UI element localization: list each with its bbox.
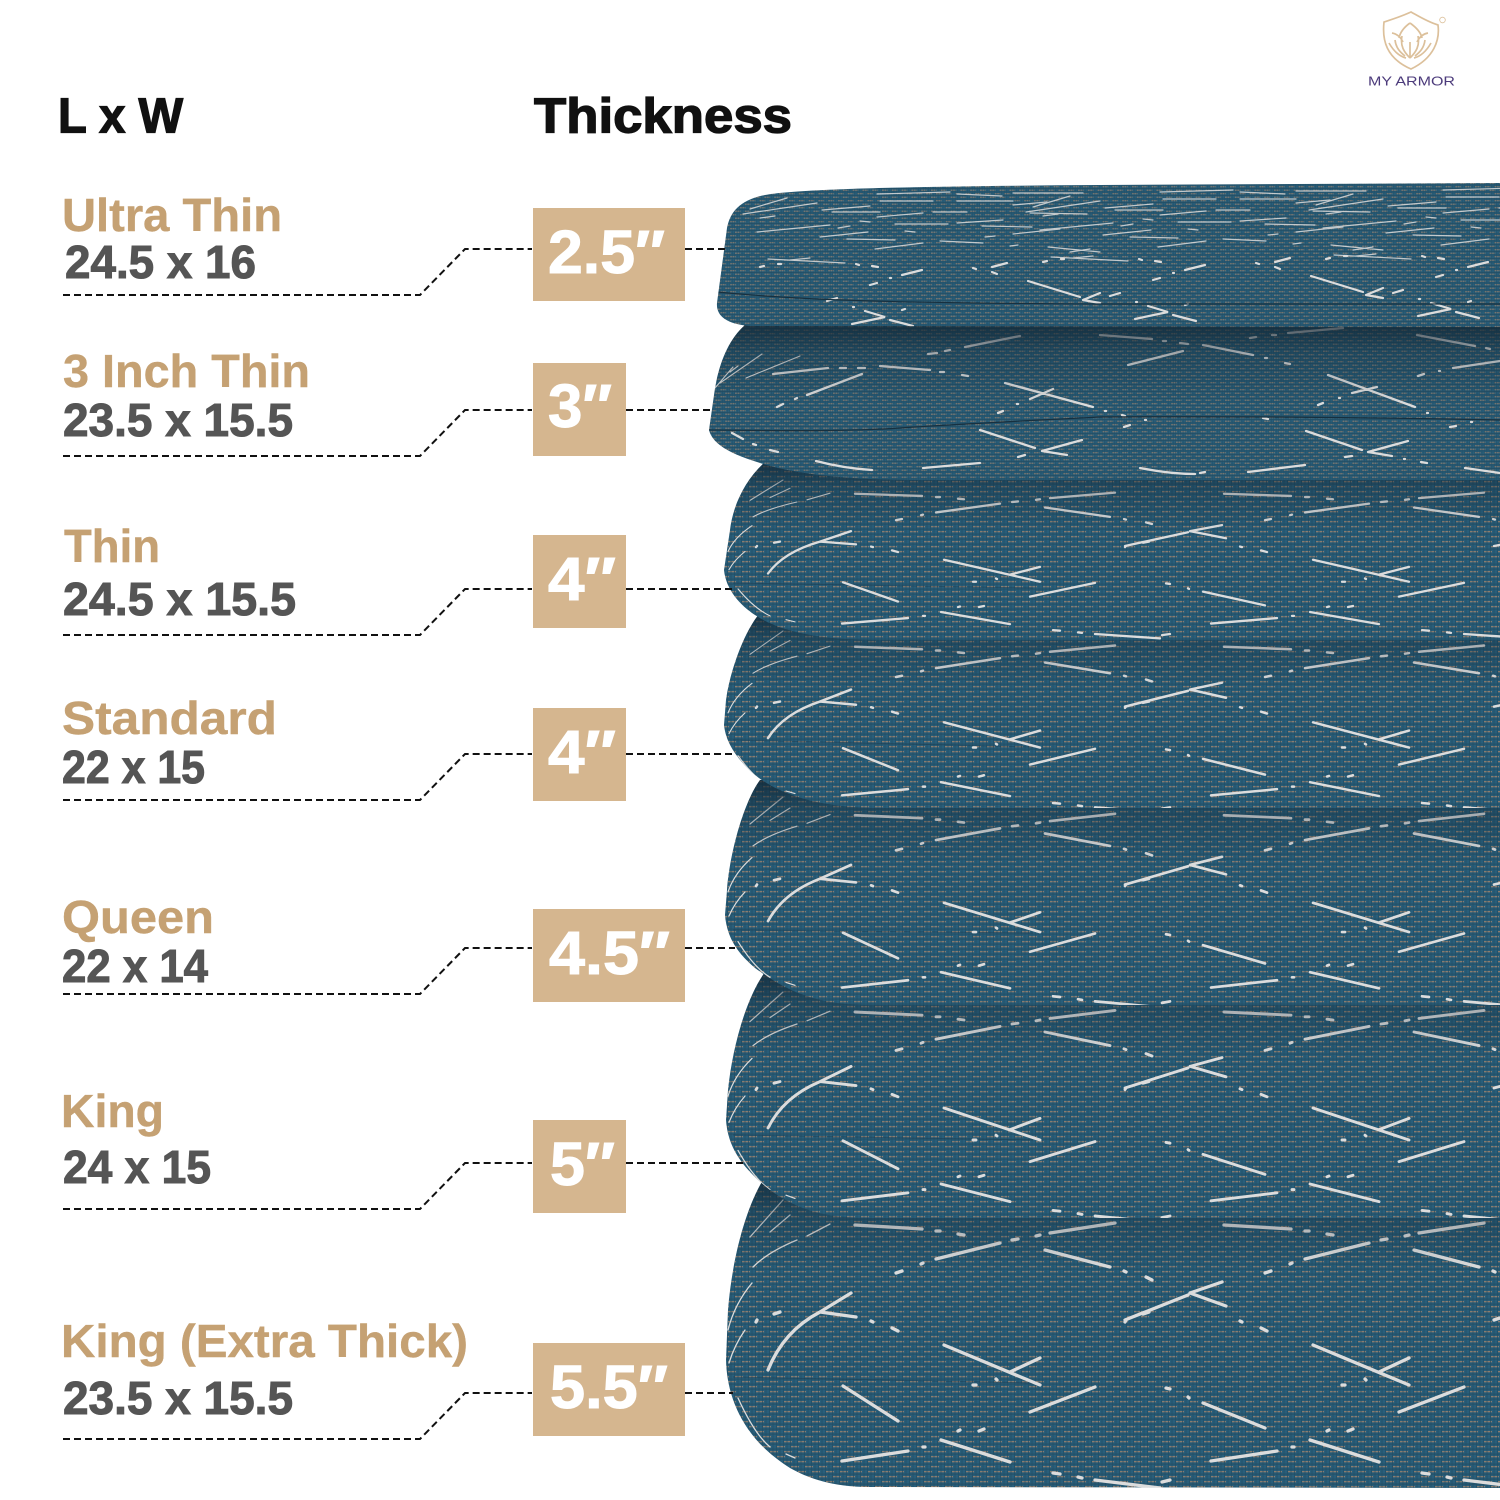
dimensions: 22 x 15: [62, 741, 205, 793]
label: 3 Inch Thin: [63, 345, 310, 397]
thickness badge: [533, 708, 626, 801]
thickness badge: 4.5″: [549, 919, 670, 987]
leader line: [63, 1393, 733, 1439]
brand logo: [1368, 12, 1455, 88]
leader line: [63, 948, 735, 994]
label: Queen: [62, 891, 214, 943]
cushion: 5.5 inch: [700, 1180, 1500, 1488]
label: Standard: [62, 692, 277, 744]
dimensions: 24 x 15: [63, 1141, 211, 1193]
heading: L x W: L x W: [58, 90, 184, 144]
row: King: [61, 1085, 745, 1213]
label: Ultra Thin: [62, 189, 282, 241]
label: Thin: [64, 520, 160, 572]
row: King (Extra Thick): [61, 1315, 733, 1439]
cushion stack: [700, 183, 1500, 1488]
thickness badge: 4″: [548, 718, 616, 786]
cushion: 3 inch: [700, 325, 1500, 480]
thickness badge: [533, 1343, 685, 1436]
label: King: [61, 1085, 164, 1137]
thickness badge: 3″: [548, 372, 612, 440]
cushion: 4.5 inch: [700, 780, 1500, 1007]
leader line: [63, 410, 712, 456]
thickness badge: [533, 909, 685, 1002]
row: Ultra Thin: [62, 189, 725, 301]
label: King (Extra Thick): [61, 1315, 468, 1367]
thickness badge: [533, 1120, 626, 1213]
thickness badge: 4″: [548, 545, 616, 613]
thickness badge: 2.5″: [548, 218, 665, 286]
thickness badge: [533, 208, 685, 301]
thickness badge: 5.5″: [550, 1353, 668, 1421]
dimensions: 24.5 x 16: [65, 236, 256, 288]
leader line: [63, 1163, 745, 1209]
row: Standard: [62, 692, 735, 801]
thickness badge: 5″: [550, 1130, 615, 1198]
dimensions: 23.5 x 15.5: [63, 1372, 293, 1424]
dimensions: 23.5 x 15.5: [63, 394, 293, 446]
leader line: [63, 754, 735, 800]
heading: Thickness: Thickness: [534, 90, 792, 144]
cushion: 4 inch standard: [700, 613, 1500, 812]
dimensions: 22 x 14: [62, 940, 208, 992]
brand name: MY ARMOR: [1368, 74, 1455, 88]
row: Thin: [63, 520, 735, 635]
thickness badge: [533, 363, 626, 456]
row: 3 Inch Thin: [63, 345, 712, 456]
cushion: 2.5 inch: [717, 183, 1500, 327]
cushion: 4 inch thin: [700, 462, 1500, 640]
cushion: 5 inch: [700, 972, 1500, 1222]
thickness badge: [533, 535, 626, 628]
row: Queen: [62, 891, 735, 1002]
icon: lotus shield: [1384, 12, 1445, 69]
leader line: [63, 589, 735, 635]
dimensions: 24.5 x 15.5: [63, 573, 296, 625]
leader line: [63, 249, 725, 295]
